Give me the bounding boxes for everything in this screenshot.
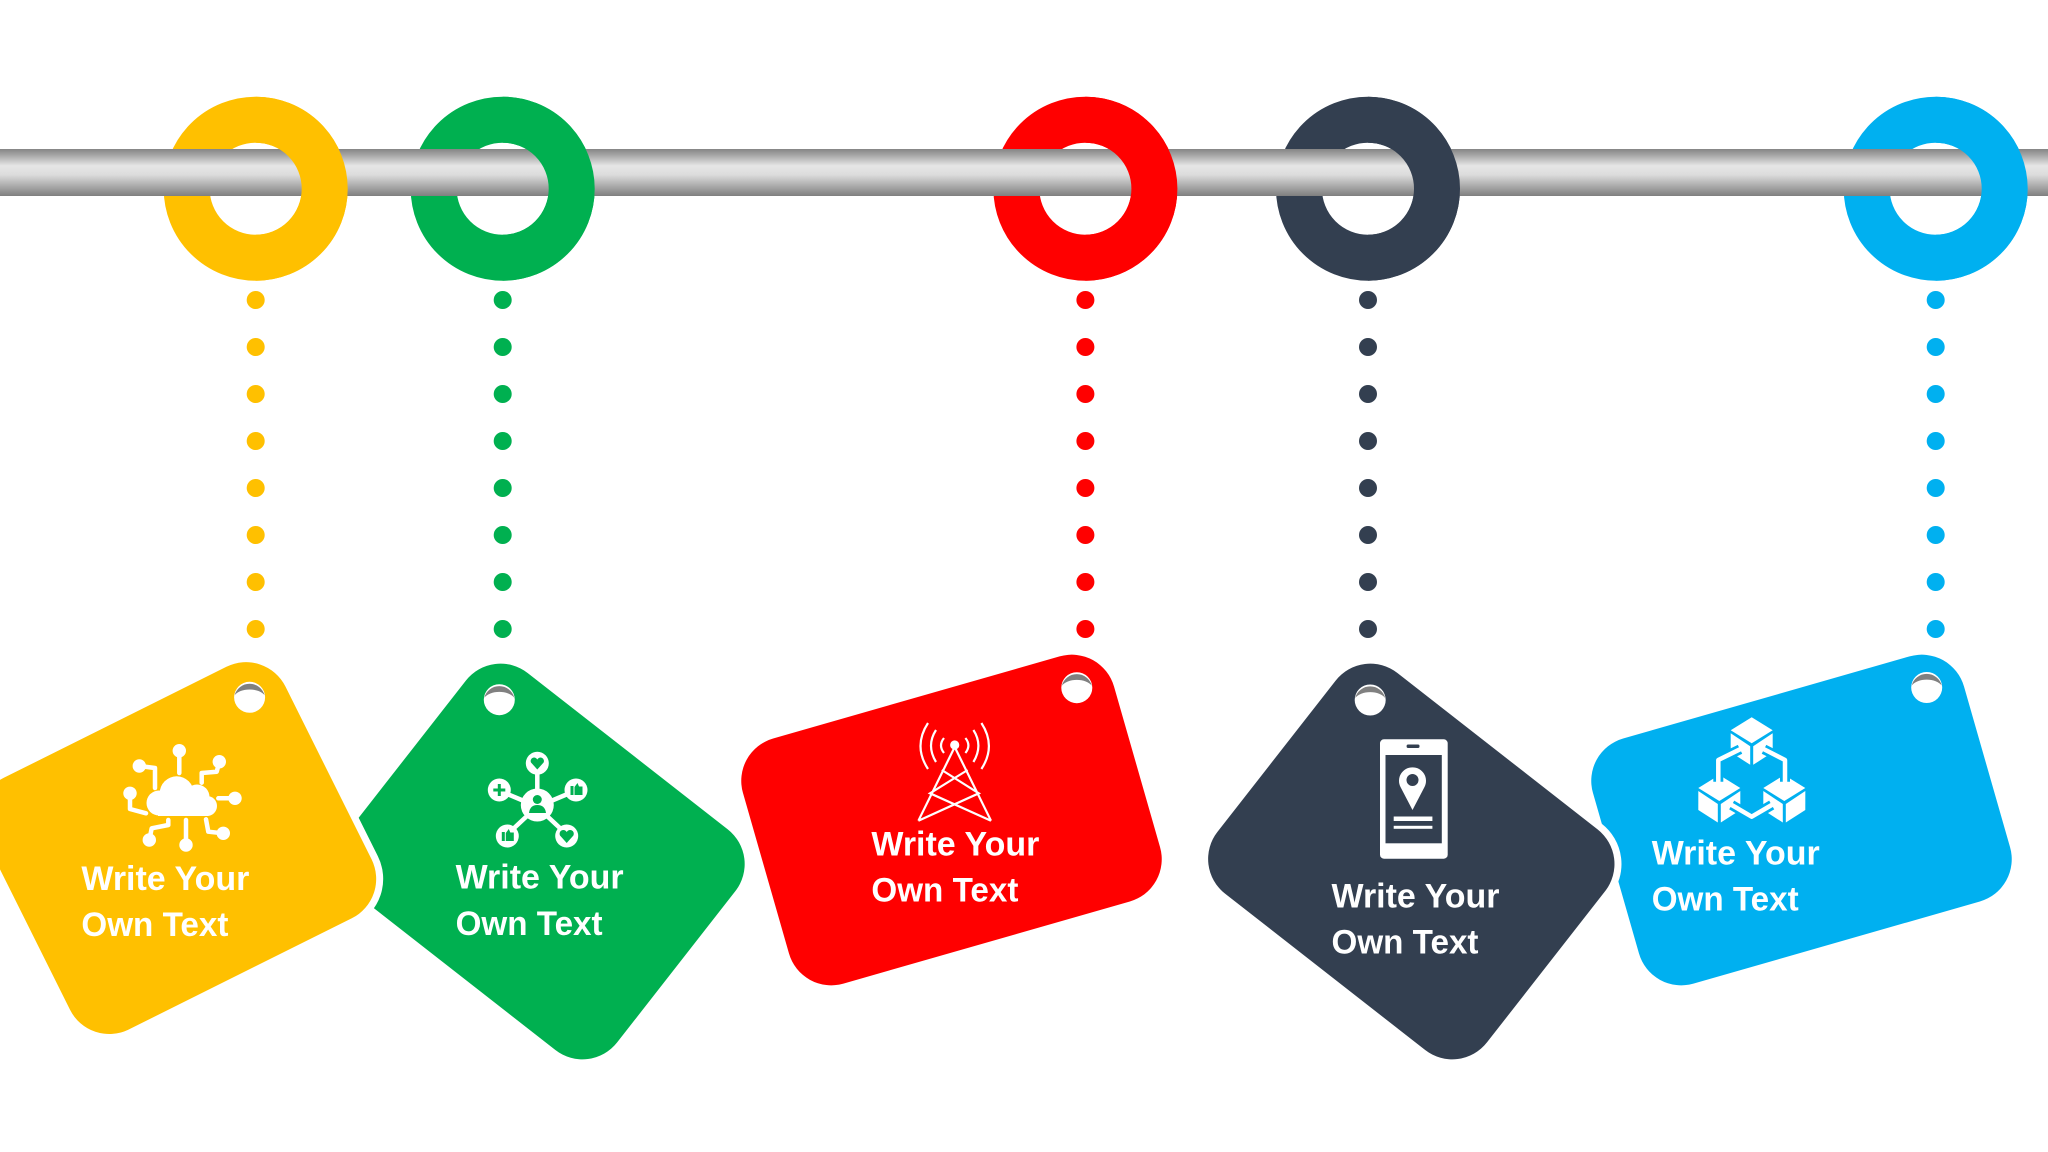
red tag text: Write Your bbox=[871, 825, 1039, 863]
icon: cloud network bbox=[123, 744, 242, 852]
dotted connector: yellow bbox=[247, 291, 265, 638]
blue tag eyelet bbox=[1911, 672, 1942, 703]
ring front: blue bbox=[1936, 120, 2005, 258]
dotted connector: blue bbox=[1927, 291, 1945, 638]
green tag text: Own Text bbox=[456, 905, 603, 943]
yellow tag text bbox=[81, 860, 249, 944]
panel: blue tag bbox=[1581, 644, 2022, 996]
blue tag text: Write Your bbox=[1652, 834, 1820, 872]
navy tag text: Write Your bbox=[1332, 877, 1500, 915]
ring front: navy bbox=[1368, 120, 1437, 258]
red tag body bbox=[731, 644, 1172, 996]
yellow tag eyelet bbox=[234, 682, 265, 713]
metal rail bbox=[0, 149, 2048, 196]
green tag text: Write Your bbox=[456, 859, 624, 897]
green tag body bbox=[321, 646, 762, 1077]
icon: radio tower bbox=[918, 723, 991, 821]
icon: connected blocks bbox=[1698, 717, 1805, 822]
ring front: yellow bbox=[256, 120, 325, 258]
panel: yellow tag bbox=[0, 647, 391, 1049]
yellow tag text: Write Your bbox=[81, 860, 249, 898]
ring front: green bbox=[503, 120, 572, 258]
ring back: yellow bbox=[187, 120, 325, 258]
blue tag text: Own Text bbox=[1652, 881, 1799, 919]
blue tag text bbox=[1652, 834, 1820, 919]
yellow tag text: Own Text bbox=[81, 906, 228, 944]
green tag text bbox=[456, 859, 624, 943]
green tag eyelet bbox=[484, 684, 515, 715]
panel: navy tag bbox=[1190, 646, 1632, 1077]
ring back: green bbox=[434, 120, 572, 258]
red tag text bbox=[871, 825, 1039, 910]
ring back: navy bbox=[1299, 120, 1437, 258]
blue tag body bbox=[1581, 644, 2022, 996]
navy tag text bbox=[1332, 877, 1500, 961]
ring back: blue bbox=[1867, 120, 2005, 258]
ring back: red bbox=[1016, 120, 1154, 258]
dotted connector: green bbox=[494, 291, 512, 638]
red tag text: Own Text bbox=[871, 872, 1018, 910]
navy tag text: Own Text bbox=[1332, 923, 1478, 961]
navy tag eyelet bbox=[1355, 684, 1386, 716]
red tag eyelet bbox=[1061, 672, 1092, 703]
yellow tag body bbox=[0, 647, 391, 1049]
icon: social network bbox=[488, 752, 588, 848]
ring front: red bbox=[1085, 120, 1154, 258]
panel: green tag bbox=[321, 646, 762, 1077]
panel: red tag bbox=[731, 644, 1172, 996]
dotted connector: navy bbox=[1359, 291, 1377, 638]
dotted connector: red bbox=[1076, 291, 1094, 638]
icon: phone with location pin bbox=[1380, 739, 1448, 859]
navy tag body bbox=[1190, 646, 1632, 1077]
